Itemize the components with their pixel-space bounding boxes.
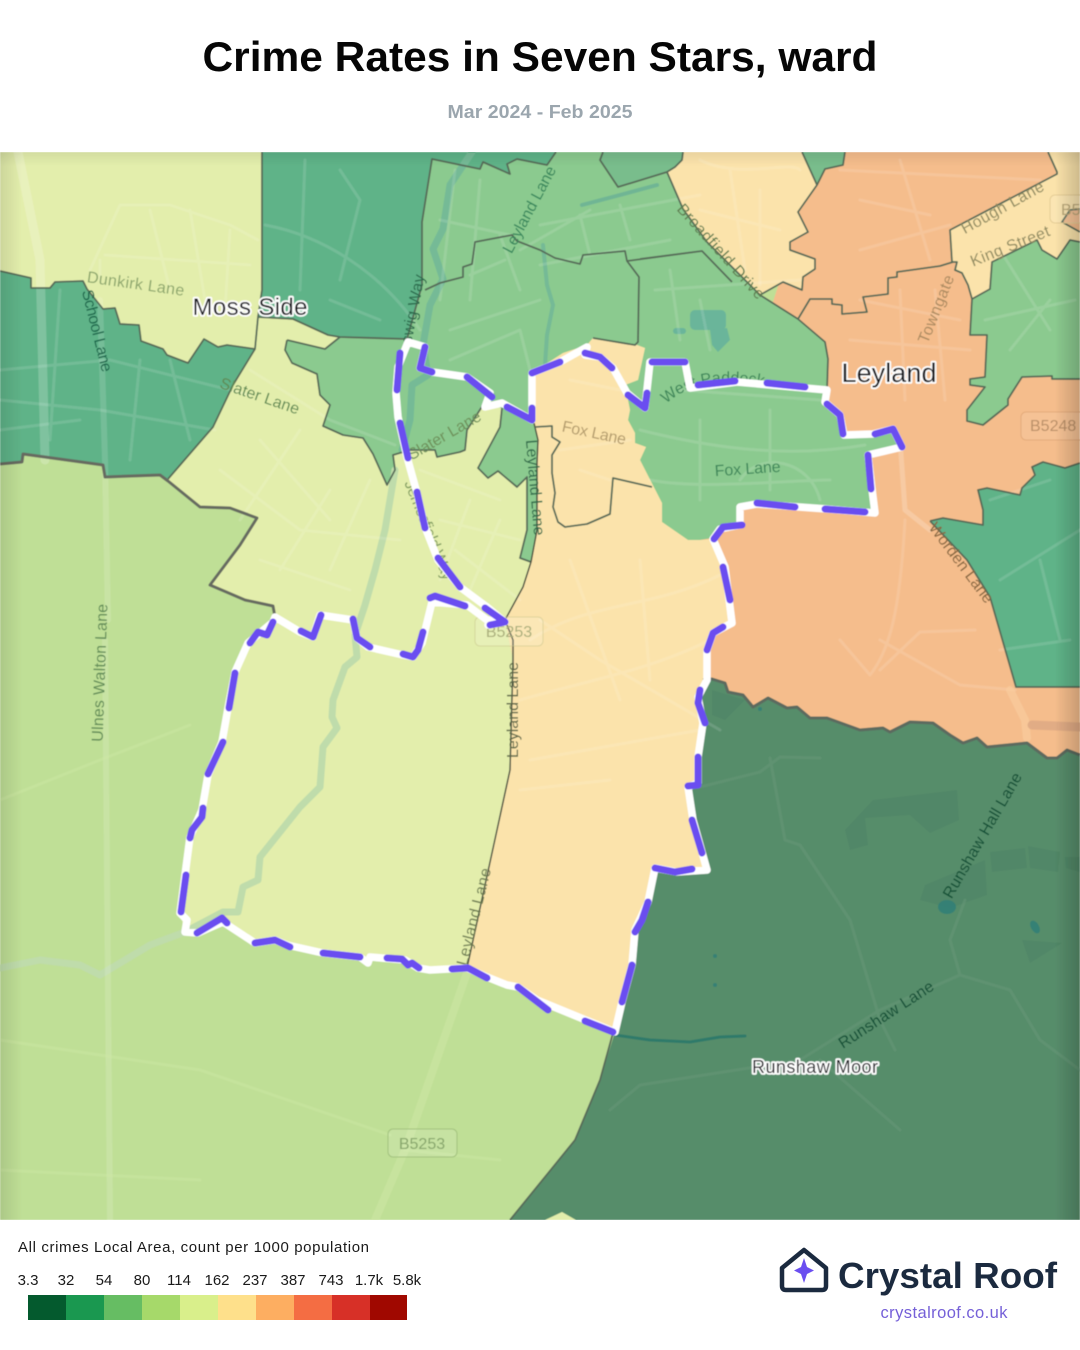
street labels: Leyland Lane: [522, 439, 547, 536]
legend scale values: 1.7k: [355, 1272, 384, 1289]
legend scale values: 743: [318, 1272, 344, 1289]
street labels: Runshaw Hall Lane: [940, 770, 1026, 901]
area: north-east pale yellow: [950, 152, 1080, 299]
road shield: B5253 north: [475, 617, 543, 646]
area: Leyland orange: [690, 152, 1080, 780]
street labels: swig Way: [399, 273, 429, 345]
ward boundary: purple dashes: [181, 347, 902, 1032]
street labels: Hough Lane: [958, 178, 1047, 238]
area: north-east mid green: [967, 240, 1080, 425]
roads: lower map: [0, 690, 1080, 1220]
legend scale values: [18, 1272, 422, 1289]
area: Moss Side and western ward pale green: [0, 152, 537, 970]
legend scale values: 54: [96, 1272, 112, 1289]
legend heading: All crimes Local Area, count per 1000 population: [18, 1239, 369, 1256]
legend colour ramp: [28, 1295, 407, 1320]
road shield: B5253 north: B5253: [486, 624, 532, 641]
street labels: Slater Lane: [405, 408, 485, 464]
wordmark: Crystal Roof: [838, 1255, 1058, 1296]
street labels: Runshaw Lane: [836, 978, 937, 1052]
logo: Crystal Roof: [782, 1250, 1058, 1322]
legend scale values: 387: [280, 1272, 306, 1289]
area: south-west light green: [0, 286, 778, 1220]
street labels: Broadfield Drive: [673, 201, 768, 303]
area: central mid green including Fox Lane: [285, 152, 902, 562]
website: crystalroof.co.uk: [880, 1304, 1008, 1322]
ponds near West Paddock: [673, 310, 730, 352]
road shield: B5248: [1021, 412, 1080, 440]
street labels: [82, 167, 1052, 1048]
street labels: Leyland Lane: [505, 662, 522, 758]
ward and area boundaries: [0, 152, 1080, 1220]
street labels: Fox Lane: [560, 419, 628, 449]
land patches on Runshaw Moor: [712, 690, 1080, 963]
area: west dark green: [0, 271, 255, 479]
street labels: Fox Lane: [714, 459, 781, 480]
street labels: Leyland Lane: [500, 163, 560, 256]
subtitle: date range: Mar 2024 - Feb 2025: [448, 101, 632, 122]
legend scale values: 5.8k: [393, 1272, 422, 1289]
map edge shading: [0, 152, 1080, 1220]
area: north small green: [802, 152, 845, 185]
road shield: B5253 south: [388, 1129, 457, 1157]
street labels: School Lane: [78, 288, 115, 374]
legend scale values: 3.3: [18, 1272, 38, 1289]
area: north dark green: [258, 152, 560, 339]
ward boundary: white base: [180, 342, 902, 1032]
road shield: B5: [1050, 195, 1080, 223]
icon: house with star: [782, 1250, 826, 1290]
road shield: B5248: B5248: [1030, 418, 1076, 435]
water bodies: [713, 707, 1042, 987]
choropleth map: [0, 152, 1080, 1220]
legend: [18, 1239, 422, 1320]
place label: Moss Side: Moss Side: [192, 294, 308, 321]
street labels: Slater Lane: [217, 375, 302, 418]
street labels: Leyland Lane: [454, 866, 495, 967]
street labels: Towngate: [915, 273, 958, 346]
area: eastern ward pale yellow: [467, 338, 732, 1032]
place label: Leyland: Leyland: [842, 358, 936, 388]
road shield: B5253 south: B5253: [399, 1136, 445, 1153]
area: eastern dark green: [930, 462, 1080, 687]
area: bottom pale wedge: [545, 1212, 576, 1220]
legend scale values: 162: [204, 1272, 230, 1289]
area: Runshaw Moor dark green: [510, 679, 1080, 1220]
title: Crime Rates in Seven Stars, ward: [202, 33, 878, 80]
street labels: Dunkirk Lane: [86, 269, 185, 300]
road shield: B5: B5: [1061, 202, 1080, 219]
legend scale values: 114: [167, 1272, 191, 1289]
street labels: West Paddock: [659, 370, 765, 402]
legend scale values: 80: [134, 1272, 150, 1289]
area: north pale yellow: [667, 152, 817, 295]
street labels: King Street: [968, 223, 1053, 270]
street labels: Ulnes Walton Lane: [90, 603, 111, 742]
legend scale values: 32: [58, 1272, 74, 1289]
roads: [0, 152, 1080, 1220]
street labels: Jemesfield Way: [400, 478, 456, 583]
area: top green patch: [600, 152, 683, 187]
streams: [0, 152, 745, 1042]
place label: Runshaw Moor: Runshaw Moor: [752, 1057, 878, 1077]
street labels: Worden Lane: [925, 520, 996, 607]
legend scale values: 237: [242, 1272, 268, 1289]
